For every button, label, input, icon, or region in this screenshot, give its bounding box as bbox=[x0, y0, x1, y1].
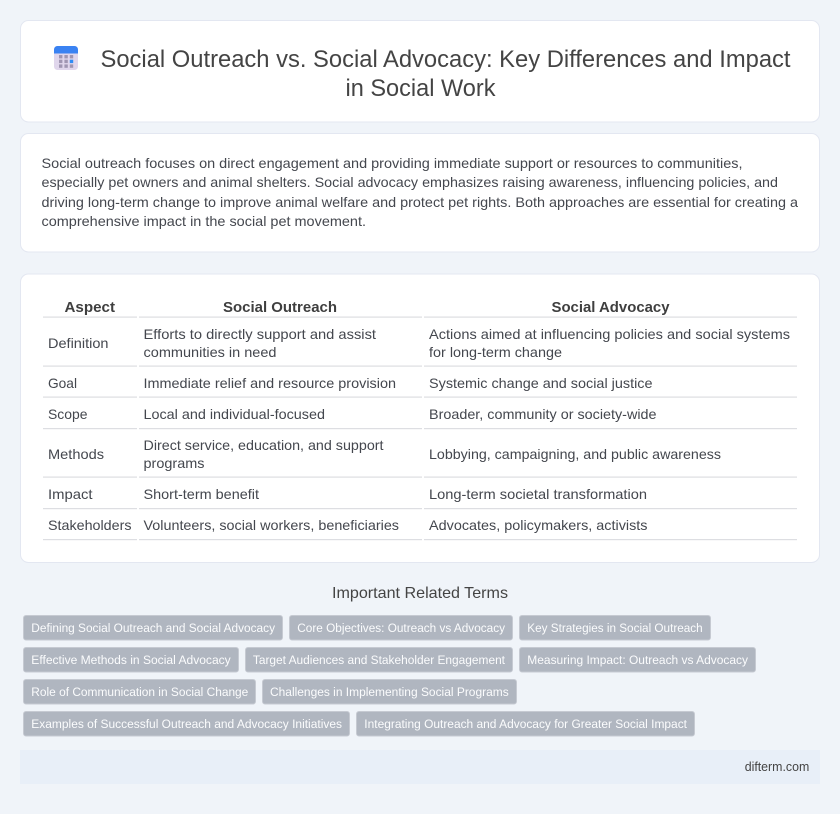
table row: Methods: programs bbox=[144, 455, 204, 471]
table row: Stakeholders: Advocates, policymakers, activists bbox=[429, 517, 648, 533]
tag row 2: Target Audiences and Stakeholder Engagement bbox=[253, 653, 506, 667]
table row: Impact: Long-term societal transformation bbox=[429, 486, 647, 502]
table row: Impact: Impact bbox=[48, 486, 93, 502]
table row: Scope: Local and individual-focused bbox=[144, 406, 325, 422]
tag row 3: Challenges in Implementing Social Programs bbox=[270, 685, 509, 699]
tag row 1: Key Strategies in Social Outreach bbox=[527, 621, 703, 635]
icon: calendar bbox=[54, 46, 78, 70]
text block: introduction paragraph: Social outreach focuses on direct engagement and providing immediate support or resources to communities, bbox=[42, 155, 743, 171]
table row: Definition: Efforts to directly support and assist bbox=[144, 326, 376, 342]
table row: Methods: Methods bbox=[48, 446, 104, 462]
tag row 1 bbox=[24, 616, 710, 640]
footer bbox=[20, 750, 820, 784]
table row: Methods: Lobbying, campaigning, and public awareness bbox=[429, 446, 721, 462]
panel: comparison table bbox=[20, 274, 820, 562]
table header row: Social Advocacy bbox=[552, 299, 670, 316]
title: Social Outreach vs. Social Advocacy: Key Differences and Impact bbox=[100, 46, 791, 73]
table row: Scope bbox=[48, 406, 657, 422]
tag row 2: Effective Methods in Social Advocacy bbox=[31, 653, 231, 667]
table row: Definition: Definition bbox=[48, 335, 108, 351]
table row: Impact: Short-term benefit bbox=[144, 486, 259, 502]
panel: title header bbox=[20, 20, 820, 122]
table row: Goal: Goal bbox=[48, 375, 77, 391]
tag row 3 bbox=[24, 680, 516, 704]
table row: Impact bbox=[48, 486, 647, 502]
tag row 2 bbox=[24, 648, 756, 672]
text block: introduction paragraph bbox=[42, 155, 798, 229]
table row: Goal: Immediate relief and resource provision bbox=[144, 375, 396, 391]
tag row 2: Measuring Impact: Outreach vs Advocacy bbox=[527, 653, 749, 667]
panel: related term tags bbox=[24, 616, 756, 736]
panel: introduction bbox=[20, 134, 820, 252]
table header row bbox=[64, 299, 670, 316]
tag row 4 bbox=[24, 712, 694, 736]
text block: introduction paragraph: especially pet owners and animal shelters. Social advocacy emphasizes raising awareness, influencing policies, and bbox=[42, 174, 778, 190]
table row: Scope: Scope bbox=[48, 406, 88, 422]
table row: Definition: for long-term change bbox=[429, 344, 562, 360]
title: in Social Work bbox=[346, 75, 496, 102]
text block: introduction paragraph: comprehensive impact in the social pet movement. bbox=[42, 213, 366, 229]
table header row: Social Outreach bbox=[223, 299, 337, 316]
table row: Methods: Direct service, education, and support bbox=[144, 437, 384, 453]
table row: Stakeholders: Stakeholders bbox=[48, 517, 132, 533]
table row: Definition: Actions aimed at influencing policies and social systems bbox=[429, 326, 790, 342]
table row: Methods bbox=[48, 437, 721, 471]
title bbox=[100, 46, 791, 102]
table row: Goal bbox=[48, 375, 653, 391]
text block: introduction paragraph: driving long-term change to improve animal welfare and protect pet rights. Both approaches are essential for creating a bbox=[42, 194, 798, 210]
table row: Stakeholders: Volunteers, social workers, beneficiaries bbox=[144, 517, 399, 533]
table row: Scope: Broader, community or society-wide bbox=[429, 406, 657, 422]
heading: important related terms: Important Related Terms bbox=[332, 585, 508, 602]
tag row 3: Role of Communication in Social Change bbox=[31, 685, 248, 699]
tag row 4: Integrating Outreach and Advocacy for Greater Social Impact bbox=[364, 717, 688, 731]
table row: Goal: Systemic change and social justice bbox=[429, 375, 653, 391]
table row: Stakeholders bbox=[48, 517, 648, 533]
table row: Definition bbox=[48, 326, 790, 360]
footer: difterm.com bbox=[745, 760, 809, 774]
table header row: Aspect bbox=[64, 299, 115, 316]
tag row 4: Examples of Successful Outreach and Advocacy Initiatives bbox=[31, 717, 342, 731]
tag row 1: Core Objectives: Outreach vs Advocacy bbox=[297, 621, 506, 635]
table row: Definition: communities in need bbox=[144, 344, 276, 360]
tag row 1: Defining Social Outreach and Social Advocacy bbox=[31, 621, 276, 635]
